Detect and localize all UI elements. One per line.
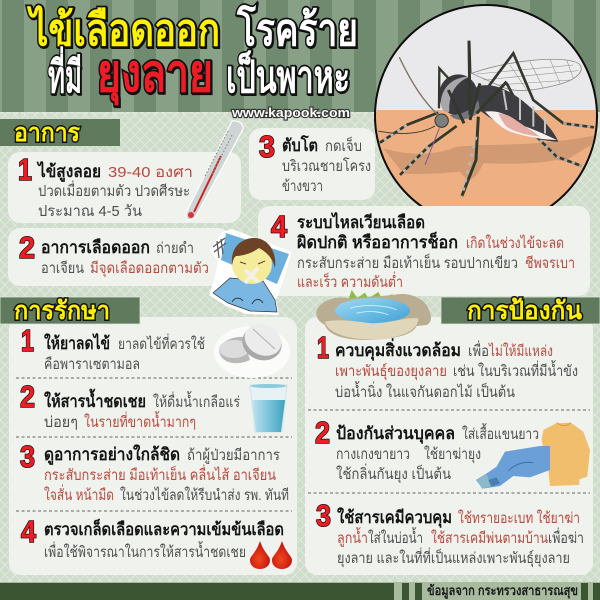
panel: treatment [9, 317, 297, 575]
treatment 3: ในช่วงไข้ลดให้รีบนำส่ง รพ. ทันที [120, 486, 289, 504]
prevention 2: ใช้กลิ่นกันยุง เป็นต้น [336, 463, 451, 484]
front and mid legs [468, 40, 472, 115]
panel: symptom 4: กระสับกระส่าย มือเท้าเย็น รอบปากเขียว [297, 253, 518, 272]
footer bar [0, 582, 600, 600]
number 4: 4 [271, 209, 288, 244]
website credit: www.kapook.com [231, 105, 350, 120]
prevention 1: 1 [317, 330, 329, 365]
prevention 2: ใช้ยาฆ่ายุง [424, 445, 481, 464]
prevention 1 [317, 330, 578, 401]
treatment 3: กระสับกระส่าย มือเท้าเย็น คลื่นไส้ อาเจียน [44, 464, 276, 484]
thorax [439, 74, 478, 116]
prevention 2: ป้องกันส่วนบุคคล [336, 424, 455, 444]
panel: symptom 1 [8, 152, 241, 223]
illustration: long sleeve shirt and trousers [476, 423, 590, 489]
header striped band [0, 0, 600, 112]
number 2: 2 [19, 230, 35, 265]
treatment 2: ในรายที่ขาดน้ำมากๆ [84, 411, 196, 431]
prevention 2: กางเกงขายาว [336, 446, 410, 463]
illustration: mosquito on skin in circle [374, 4, 598, 206]
treatment 2: ให้สารน้ำชดเชย [44, 388, 146, 411]
prevention 3 [316, 498, 584, 568]
prevention 2 [315, 415, 539, 484]
prevention 2: 2 [315, 415, 330, 450]
prevention 3: เพื่อฆ่า [548, 527, 584, 547]
panel: symptom 1: ประมาณ 4-5 วัน [38, 203, 142, 220]
panel: symptom 4: เกิดในช่วงไข้จะลด [466, 234, 564, 252]
treatment 2 [20, 379, 240, 431]
icon: thermometer [186, 121, 243, 220]
treatment 4: ตรวจเกล็ดเลือดและความเข้มข้นเลือด [44, 517, 284, 539]
prevention 3: ลูกน้ำ [337, 527, 368, 547]
title: โรคร้าย [236, 3, 358, 55]
number 3: 3 [259, 129, 275, 164]
wing [472, 59, 581, 91]
panel: symptom 4 [258, 206, 590, 296]
prevention 1: เพื่อ [468, 340, 489, 360]
head, antennae, proboscis [435, 114, 448, 127]
treatment 2: บ่อยๆ [44, 414, 78, 431]
panel: symptom 2: มีจุดเลือดออกตามตัว [90, 260, 209, 278]
illustration: pond [316, 290, 431, 340]
treatment 1: ยาลดไข้ที่ควรใช้ [118, 333, 205, 353]
panel: symptom 1: ปวดเมื่อยตามตัว ปวดศีรษะ [38, 180, 190, 200]
treatment 3: ดูอาการอย่างใกล้ชิด [44, 444, 180, 466]
treatment 4 [21, 514, 284, 561]
panel: symptom 1: 39-40 องศา [108, 164, 193, 181]
section heading: treatment: การรักษา [14, 297, 110, 325]
prevention 1: เพาะพันธุ์ของยุงลาย [335, 363, 447, 381]
treatment 2: 2 [20, 379, 35, 414]
panel: symptom 3: บริเวณชายโครง [282, 157, 371, 175]
prevention 2: ใส่เสื้อแขนยาว [462, 423, 539, 443]
panel: symptom 3: ตับโต [282, 135, 318, 155]
section heading: prevention: การป้องกัน [467, 297, 582, 325]
prevention 3: ใส่ในบ่อน้ำ [368, 527, 423, 547]
panel: symptom 4: และเร็ว ความดันต่ำ [297, 271, 403, 291]
treatment 1: คือพาราเซตามอล [44, 356, 140, 373]
section heading: symptoms: อาการ [14, 119, 81, 147]
prevention 1: บ่อน้ำนิ่ง ในแจกันดอกไม้ เป็นต้น [335, 381, 515, 401]
panel: symptom 3: กดเจ็บ [325, 136, 362, 155]
panel: symptom 2: อาการเลือดออก [41, 237, 150, 257]
treatment 4: 4 [21, 514, 37, 549]
treatment 3: 3 [20, 439, 35, 474]
panel: symptom 1: ไข้สูงลอย [36, 161, 101, 183]
title [27, 3, 358, 106]
title: เป็นพาหะ [226, 50, 350, 102]
prevention 1: ควบคุมสิ่งแวดล้อม [335, 338, 461, 361]
prevention 3: ใช้สารเคมีพ่นตามบ้าน [431, 529, 548, 547]
panel: symptom 2 [8, 228, 230, 286]
title: ยุงลาย [97, 45, 213, 106]
treatment 3: ถ้าผู้ป่วยมีอาการ [187, 447, 280, 464]
abdomen [475, 85, 558, 142]
panel: symptom 3 [249, 128, 375, 200]
treatment 3: ใจสั่น หน้ามืด [44, 484, 114, 504]
panel: symptom 4: ระบบไหลเวียนเลือด [297, 212, 425, 232]
treatment 2: ให้ดื่มน้ำเกลือแร่ [153, 391, 240, 411]
treatment 1: ให้ยาลดไข้ [44, 333, 110, 353]
panel: prevention [305, 317, 593, 575]
prevention 1: ไม่ให้มีแหล่ง [488, 342, 553, 360]
icon: tablets [214, 318, 290, 378]
prevention 3: 3 [316, 498, 331, 533]
icon: glass of water [250, 384, 287, 432]
panel: symptom 4: ชีพจรเบา [525, 255, 575, 272]
number 1: 1 [18, 152, 32, 187]
treatment 3 [20, 439, 289, 504]
panel: symptom 2: อาเจียน [41, 260, 84, 277]
rear legs [483, 53, 594, 127]
panel: symptom 4: ผิดปกติ หรืออาการช็อก [297, 230, 458, 252]
treatment 4: เพื่อใช้พิจารณาในการให้สารน้ำชดเชย [44, 541, 246, 561]
prevention 1: เช่น ในบริเวณที่มีน้ำขัง [453, 360, 578, 380]
icon: blood drops [250, 541, 292, 569]
treatment 1: 1 [21, 323, 34, 358]
section heading: symptoms [0, 119, 120, 147]
panel: symptom 3: ข้างขวา [282, 178, 323, 195]
prevention 3: ใช้สารเคมีควบคุม [337, 507, 452, 528]
source credit: ข้อมูลจาก กระทรวงสาธารณสุข [427, 583, 578, 599]
title: ที่มี [48, 46, 82, 102]
panel: symptom 2: ถ่ายดำ [156, 240, 194, 257]
treatment 1 [21, 323, 205, 373]
skin shadow [383, 135, 597, 179]
title: ไข้เลือดออก [27, 4, 220, 55]
illustration: sick girl in bed [209, 229, 292, 315]
